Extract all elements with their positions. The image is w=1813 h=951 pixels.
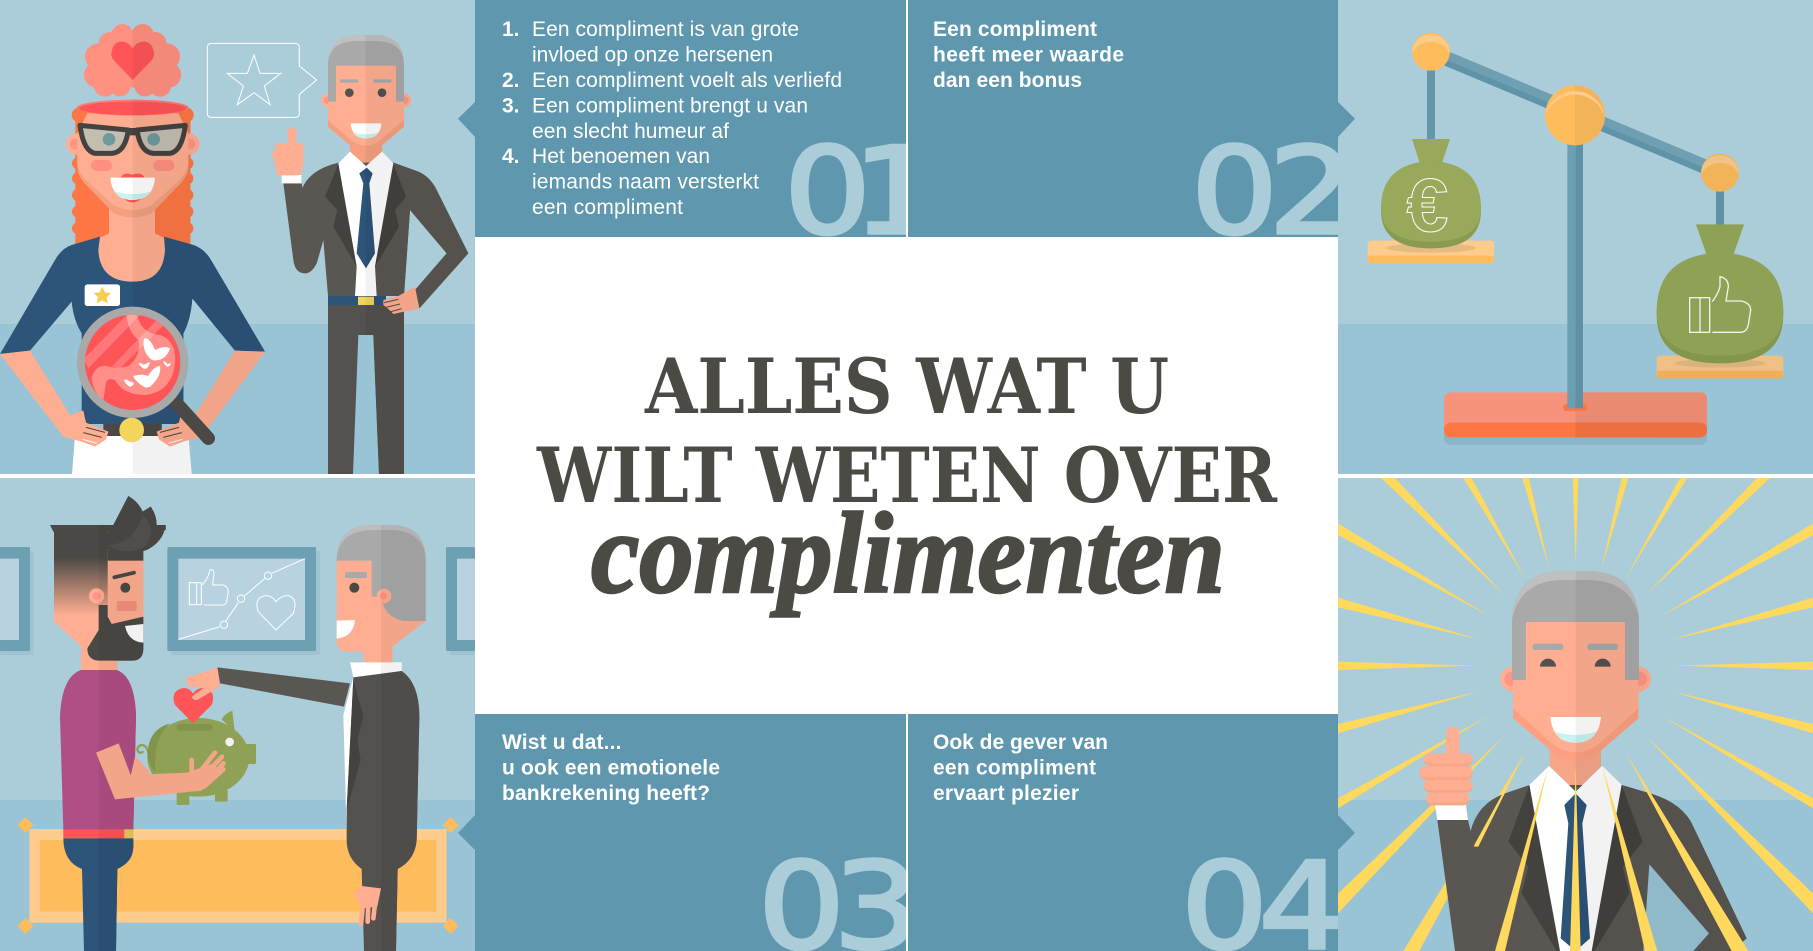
- numbered list: 1.: [502, 18, 520, 41]
- icon: red heart: [173, 688, 213, 723]
- panel: woman and man with compliment: [0, 0, 475, 474]
- panel 01: [458, 0, 906, 237]
- numbered list: een compliment: [532, 196, 683, 219]
- woman figure: [0, 24, 265, 474]
- sun rays in front of suit: [1473, 753, 1748, 951]
- left pan with euro money bag: €: [1407, 164, 1448, 248]
- panel 03: [458, 714, 920, 951]
- right pan with thumbs-up money bag: [1657, 224, 1783, 378]
- statement text: heeft meer waarde: [933, 44, 1124, 66]
- number 02: 02: [1191, 123, 1356, 262]
- numbered list: iemands naam versterkt: [532, 170, 759, 194]
- question text: [502, 731, 720, 805]
- icon: speech bubble with star: [207, 43, 317, 117]
- older man in profile: [337, 525, 426, 951]
- numbered list: Het benoemen van: [532, 145, 710, 168]
- framed picture with chart, thumb and heart: [167, 547, 320, 655]
- arrow pointing right: [1338, 815, 1355, 850]
- pivot balls: [1412, 33, 1739, 192]
- icon: green piggy bank: [137, 711, 256, 805]
- scale base: [1444, 392, 1707, 445]
- numbered list: Een compliment voelt als verliefd: [532, 69, 842, 92]
- title block: [536, 342, 1278, 618]
- numbered list: Een compliment brengt u van: [532, 94, 808, 118]
- title block: ALLES WAT U: [644, 342, 1169, 431]
- arrow pointing left: [458, 102, 475, 137]
- numbered list: Een compliment is van grote: [532, 18, 799, 41]
- sun rays behind: [1338, 478, 1813, 951]
- question text: Wist u dat...: [502, 731, 622, 754]
- numbered list: 4.: [502, 145, 520, 168]
- statement text: een compliment: [933, 756, 1096, 780]
- number 01: 01: [784, 123, 939, 262]
- framed picture left: [0, 547, 33, 655]
- bearded man's arm and hand: [96, 743, 223, 799]
- man with thumbs up: [272, 35, 468, 474]
- panel: happy man with sun rays: [1338, 478, 1813, 951]
- panel 02: [908, 0, 1356, 262]
- statement text: dan een bonus: [933, 69, 1082, 92]
- framed picture right: [446, 547, 475, 655]
- panel: piggy bank exchange: [0, 478, 475, 951]
- statement text: [933, 18, 1124, 92]
- bearded man: [50, 496, 166, 951]
- orange bench: [17, 817, 459, 934]
- numbered list: [502, 18, 842, 219]
- smiling man: [1455, 571, 1747, 951]
- older man's arm and hand: [185, 667, 350, 707]
- numbered list: een slecht humeur af: [532, 120, 729, 143]
- arrow pointing left: [458, 815, 475, 850]
- numbered list: 2.: [502, 69, 520, 92]
- numbered list: invloed op onze hersenen: [532, 44, 773, 66]
- statement text: Een compliment: [933, 18, 1097, 41]
- question text: bankrekening heeft?: [502, 782, 710, 805]
- left pan with euro money bag: [1368, 139, 1494, 263]
- question text: u ook een emotionele: [502, 756, 720, 780]
- title block: complimenten: [591, 490, 1225, 618]
- panel: balance scale: [1338, 0, 1813, 474]
- statement text: Ook de gever van: [933, 731, 1108, 754]
- magnifying glass with butterflies: [81, 311, 208, 442]
- numbered list: 3.: [502, 94, 520, 118]
- title block: WILT WETEN OVER: [536, 431, 1278, 520]
- statement text: [933, 731, 1108, 805]
- panel 04: [908, 714, 1355, 951]
- scale beam and post: [1427, 52, 1724, 408]
- statement text: ervaart plezier: [933, 782, 1079, 805]
- raised arm with thumbs up: [1420, 726, 1474, 951]
- arrow pointing right: [1338, 102, 1355, 137]
